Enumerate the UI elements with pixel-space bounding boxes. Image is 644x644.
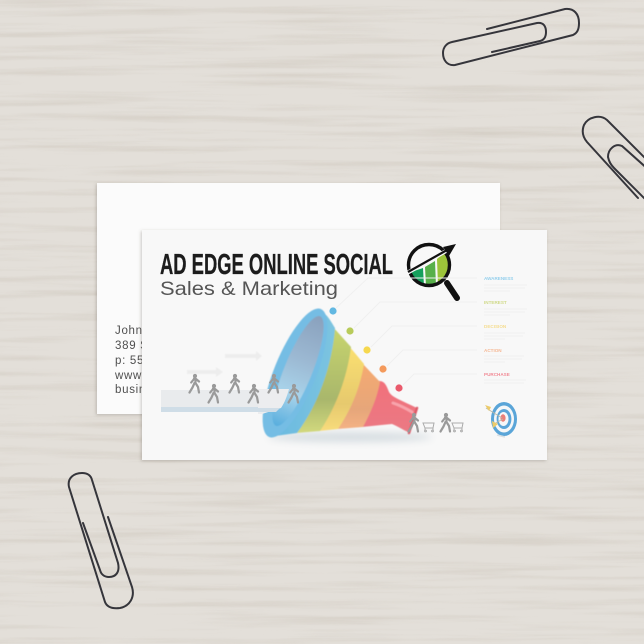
subtitle: Sales & Marketing [160,278,338,300]
band: green [296,327,351,433]
card front [142,230,547,460]
band: orange [337,363,380,429]
leader lines [336,278,477,385]
card back: contact details: p: 555 555 5555 [115,355,209,367]
paper clip: top [443,9,579,65]
band: blue outer [269,312,335,436]
paper clip: right [583,117,644,204]
logo handle [447,283,457,298]
card back: contact details: John Smith [115,325,180,337]
funnel [250,301,417,445]
label: interest: INTEREST [484,300,507,305]
funnel shadow [268,432,432,442]
label: decision: DECISION [484,324,507,329]
band: red nozzle [362,381,417,433]
nozzle rim [409,408,417,433]
band: yellow [319,346,364,431]
platform entry into funnel mouth [258,389,289,414]
paper clip: bottom left [69,473,133,608]
card back: contact details: www.website.com [114,370,217,382]
funnel mouth inner [263,311,333,431]
funnel mouth [250,301,340,445]
platform edge in funnel mouth [258,408,280,412]
card back [97,183,500,414]
logo arrow [407,244,456,273]
walking people [190,374,298,402]
card back: contact details: 389 Some Street [115,340,212,352]
stage labels [484,276,527,383]
platform [161,390,296,412]
label: purchase: PURCHASE [484,372,510,377]
card back: contact details [114,325,237,396]
title: AD EDGE ONLINE SOCIAL [160,249,393,281]
funnel dots [329,307,403,392]
card back: contact details: business@email.com [115,384,237,396]
shoppers with carts [408,413,463,432]
label: awareness: AWARENESS [484,276,513,281]
label: action: ACTION [484,348,502,353]
target with arrows [485,402,517,437]
logo bars [412,254,448,284]
direction arrows [187,351,262,377]
logo ring [408,244,450,286]
nozzle highlight [393,403,412,412]
logo: magnifier with growth chart [407,244,457,298]
